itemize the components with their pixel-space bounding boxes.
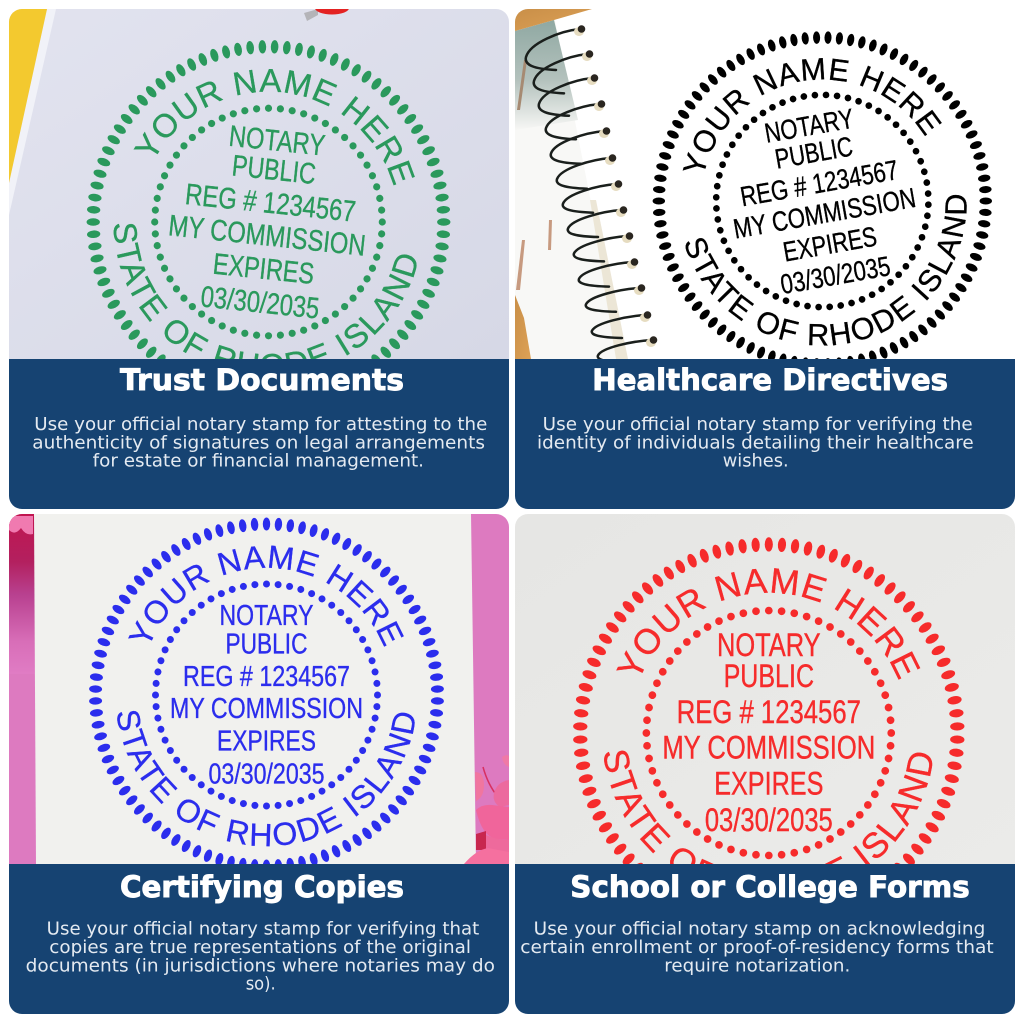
stamp: red notary seal bbox=[573, 537, 964, 864]
stamp: green notary seal bbox=[86, 40, 450, 359]
stamp: red notary seal: YOUR NAME HERE bbox=[616, 568, 920, 680]
caption banner bbox=[9, 864, 509, 1014]
stamp: blue notary seal: MY COMMISSION bbox=[170, 693, 363, 725]
stamp: black notary seal: STATE OF RHODE ISLAND bbox=[686, 194, 967, 346]
icon: pink flowers bbox=[464, 755, 511, 864]
panel: trust documents bbox=[9, 9, 509, 509]
stamp: blue notary seal: NOTARY bbox=[220, 600, 314, 632]
stamp: green notary seal: EXPIRES bbox=[211, 248, 316, 291]
body text: Use your official notary stamp on acknowledging bbox=[534, 919, 985, 940]
stamp: blue notary seal bbox=[89, 518, 444, 864]
stamp: blue notary seal: STATE OF RHODE ISLAND bbox=[117, 710, 415, 846]
stamp: black notary seal: NOTARY bbox=[762, 103, 856, 149]
stamp: green notary seal: REG # 1234567 bbox=[184, 178, 357, 229]
photo: lavender paper with yellow corner bbox=[9, 2, 509, 359]
photo: light grey paper bbox=[515, 514, 1015, 864]
stamp: green notary seal: YOUR NAME HERE bbox=[134, 69, 415, 186]
body text bbox=[32, 414, 487, 472]
body text: authenticity of signatures on legal arrangements bbox=[32, 432, 485, 453]
stamp: blue notary seal: EXPIRES bbox=[217, 726, 316, 758]
panel: certifying copies bbox=[9, 514, 509, 1014]
body text bbox=[537, 414, 974, 472]
heading: School or College Forms bbox=[570, 870, 970, 904]
stamp: black notary seal: YOUR NAME HERE bbox=[682, 58, 942, 171]
panel: school or college forms bbox=[515, 514, 1015, 1014]
body text: for estate or financial management. bbox=[93, 451, 424, 472]
stamp: green notary seal: STATE OF RHODE ISLAND bbox=[114, 224, 417, 359]
body text: Use your official notary stamp for verifying that bbox=[47, 919, 479, 940]
body text: Use your official notary stamp for attesting to the bbox=[34, 414, 487, 435]
body text: wishes. bbox=[723, 451, 789, 472]
caption banner bbox=[515, 864, 1015, 1014]
stamp: red notary seal: EXPIRES bbox=[714, 765, 823, 801]
body text: require notarization. bbox=[664, 955, 850, 976]
stamp: green notary seal: NOTARY bbox=[227, 120, 327, 163]
stamp: black notary seal: EXPIRES bbox=[781, 221, 879, 268]
stamp: red notary seal: MY COMMISSION bbox=[662, 729, 875, 765]
stamp: blue notary seal: REG # 1234567 bbox=[183, 661, 350, 693]
stamp: blue notary seal: 03/30/2035 bbox=[208, 759, 324, 791]
stamp: black notary seal bbox=[652, 31, 992, 359]
stamp: red notary seal: STATE OF RHODE ISLAND bbox=[604, 750, 932, 864]
photo: spiral notebook on white wood bbox=[515, 9, 658, 359]
stamp: black notary seal: MY COMMISSION bbox=[731, 182, 918, 245]
body text: Use your official notary stamp for verifying the bbox=[543, 414, 973, 435]
stamp: red notary seal: NOTARY bbox=[717, 627, 821, 663]
heading: Trust Documents bbox=[120, 363, 404, 397]
body text: so). bbox=[246, 974, 276, 995]
body text bbox=[26, 919, 495, 995]
stamp: red notary seal: PUBLIC bbox=[724, 658, 814, 694]
stamp: black notary seal: PUBLIC bbox=[772, 131, 855, 175]
stamp: blue notary seal: PUBLIC bbox=[226, 628, 308, 660]
stamp: blue notary seal: YOUR NAME HERE bbox=[128, 546, 404, 647]
heading: Certifying Copies bbox=[120, 870, 404, 904]
body text: identity of individuals detailing their healthcare bbox=[537, 432, 974, 453]
stamp: red notary seal: REG # 1234567 bbox=[677, 694, 861, 730]
body text: certain enrollment or proof-of-residency forms that bbox=[520, 937, 994, 958]
body text: documents (in jurisdictions where notaries may do bbox=[26, 955, 495, 976]
body text bbox=[520, 919, 994, 976]
body text: copies are true representations of the original bbox=[49, 937, 471, 958]
stamp: black notary seal: REG # 1234567 bbox=[738, 154, 900, 212]
heading: Healthcare Directives bbox=[592, 363, 948, 397]
photo: white paper on pink background with flowers bbox=[9, 514, 511, 864]
panel: healthcare directives bbox=[515, 9, 1015, 509]
icon: notebook coils bbox=[526, 25, 657, 363]
caption banner bbox=[9, 359, 509, 509]
stamp: black notary seal: 03/30/2035 bbox=[778, 250, 893, 300]
stamp: red notary seal: 03/30/2035 bbox=[705, 802, 833, 838]
stamp: green notary seal: MY COMMISSION bbox=[167, 209, 367, 263]
caption banner bbox=[515, 359, 1015, 509]
stamp: green notary seal: PUBLIC bbox=[230, 149, 317, 191]
stamp: green notary seal: 03/30/2035 bbox=[199, 280, 321, 326]
